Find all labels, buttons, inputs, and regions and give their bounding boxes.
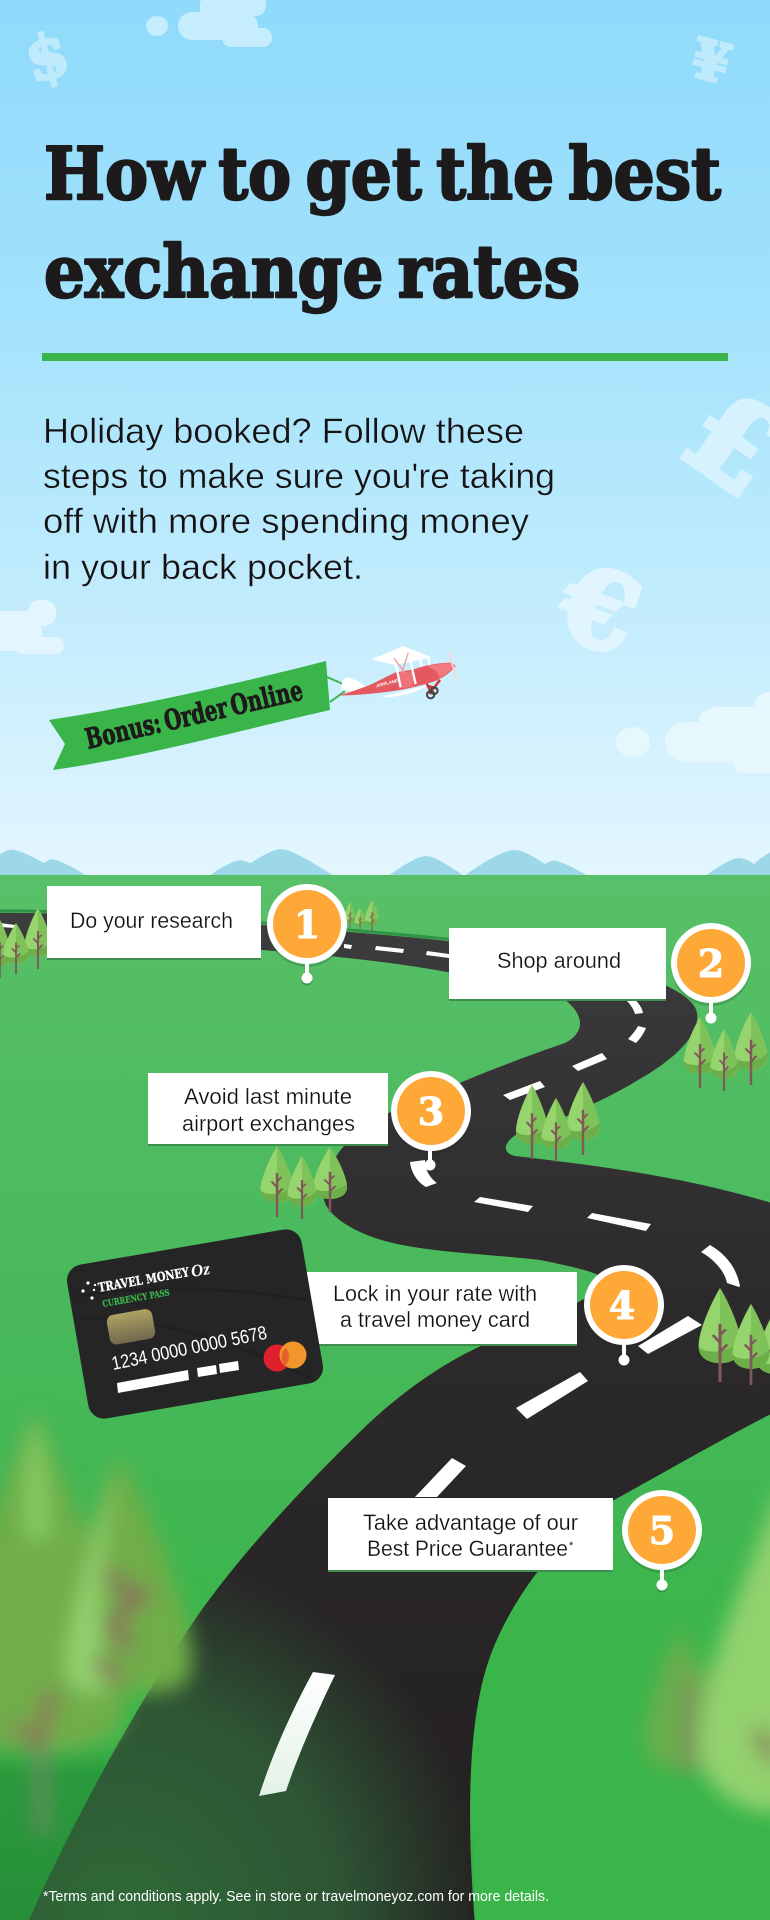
road island with trees <box>516 1082 600 1162</box>
trees: far left <box>0 908 52 978</box>
footnote: *Terms and conditions apply. See in store or travelmoneyoz.com for more details. <box>43 1889 549 1905</box>
title <box>44 131 721 314</box>
box 2: shop around: Shop around <box>497 948 621 973</box>
box 5: best price guarantee: Take advantage of our <box>363 1510 578 1535</box>
badge 4 <box>584 1265 664 1366</box>
box 4: lock in your rate: Lock in your rate with <box>333 1281 537 1306</box>
travel money card: 1234 0000 0000 5678 <box>110 1323 269 1375</box>
cloud: right <box>616 692 770 773</box>
banner: Bonus Order Online <box>49 661 345 770</box>
road <box>0 911 770 1920</box>
card streaks <box>76 1289 310 1378</box>
icon: yen sign: ¥ <box>685 25 737 97</box>
mountains <box>0 849 770 876</box>
trees: right of badge 2 <box>684 1012 768 1091</box>
intro paragraph: steps to make sure you're taking <box>43 457 555 496</box>
badge 2: 2 <box>698 941 724 986</box>
box 1: do your research <box>47 886 261 960</box>
box 5: best price guarantee <box>328 1498 613 1572</box>
trees: below box 3 <box>260 1146 347 1219</box>
box 3: avoid last minute airport exchanges <box>148 1073 388 1146</box>
title: exchange rates <box>44 229 580 314</box>
divider bar <box>42 353 728 361</box>
box 5: best price guarantee: Best Price Guarantee <box>367 1536 568 1561</box>
ground shade: bottom left <box>0 1740 220 1920</box>
badge 1: 1 <box>294 902 320 947</box>
icon: red biplane: AIRPLANE <box>376 678 398 688</box>
cloud: left <box>0 600 64 654</box>
icon: red biplane <box>338 646 457 698</box>
travel money card: TRAVEL MONEY <box>97 1264 191 1295</box>
badge 3: 3 <box>418 1089 444 1134</box>
sky background <box>0 0 770 880</box>
intro paragraph: in your back pocket. <box>43 548 363 587</box>
box 4: lock in your rate <box>300 1272 577 1346</box>
card logo dots <box>81 1281 96 1300</box>
box 2: shop around <box>449 928 666 1001</box>
banner: Bonus Order Online: Bonus: Order Online <box>82 674 306 756</box>
box 4: lock in your rate: a travel money card <box>340 1307 530 1332</box>
ground <box>0 875 770 1920</box>
badge 4: 4 <box>609 1283 635 1328</box>
box 3: avoid last minute airport exchanges: Avoid last minute <box>184 1084 352 1109</box>
box 3: avoid last minute airport exchanges: airport exchanges <box>182 1111 355 1136</box>
blurred foreground trees: left <box>0 1410 192 1835</box>
intro paragraph: Holiday booked? Follow these <box>43 412 524 451</box>
road shade: foreground green tint <box>27 1424 475 1920</box>
travel money card: Oz <box>189 1259 212 1281</box>
cloud: top <box>146 0 272 47</box>
icon: euro sign: € <box>544 539 655 680</box>
badge 5 <box>622 1490 702 1592</box>
badge 1 <box>267 884 347 986</box>
travel money card <box>64 1227 326 1421</box>
box 1: do your research: Do your research <box>70 908 233 933</box>
trees: small behind badge 1 <box>344 900 379 932</box>
travel money card: CURRENCY PASS <box>102 1288 170 1310</box>
intro paragraph <box>43 412 555 587</box>
road lane markings <box>0 923 740 1796</box>
badge 2 <box>671 923 751 1024</box>
badge 5: 5 <box>649 1508 675 1553</box>
blurred foreground trees: right <box>645 1490 770 1812</box>
icon: dollar sign: $ <box>18 19 76 97</box>
box 5: best price guarantee: * <box>569 1540 574 1552</box>
badge 3 <box>391 1071 471 1170</box>
trees: right of badge 4 <box>699 1288 770 1390</box>
intro paragraph: off with more spending money <box>43 502 530 541</box>
